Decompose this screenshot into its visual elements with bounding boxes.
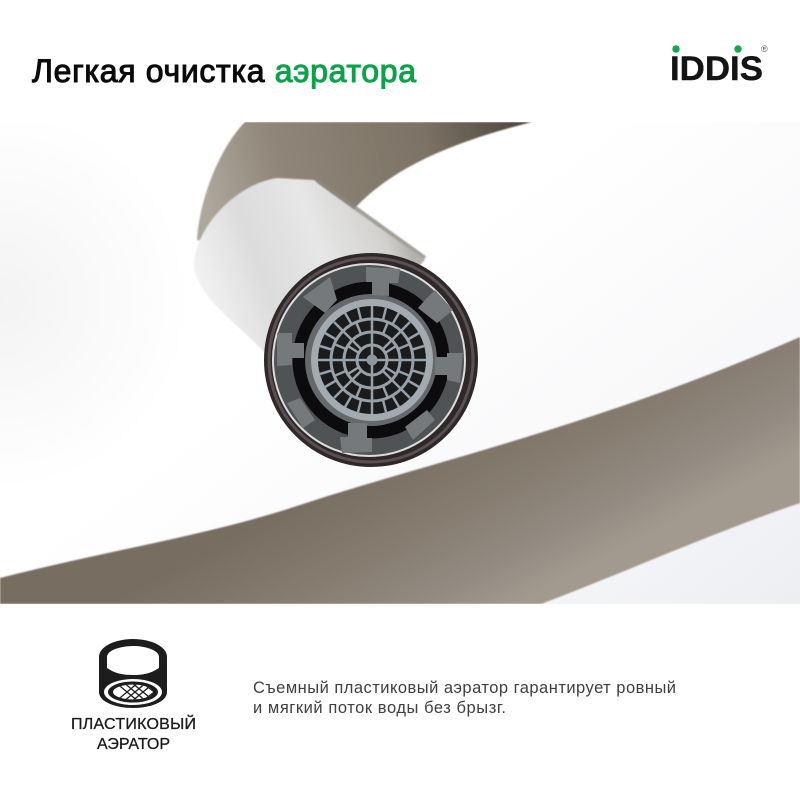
photo: faucet aerator close-up: [0, 122, 800, 604]
logo: IDDIS: ®: [761, 44, 768, 54]
spout dark edge: [318, 181, 425, 258]
T-shaped and block tabs: [277, 267, 463, 453]
black gap ring: [300, 289, 442, 431]
description text: [253, 679, 676, 717]
faucet arc tube: [196, 122, 532, 241]
icon caption: АЭРАТОР: [97, 736, 170, 753]
icon: plastic aerator: [99, 639, 167, 708]
description text: и мягкий поток воды без брызг.: [253, 699, 506, 717]
aerator assembly: [264, 253, 478, 467]
faucet lower tube band: [0, 337, 800, 604]
icon caption: [71, 714, 196, 753]
title: Легкая очистка аэратора: [32, 53, 416, 89]
brushed steel spout: [194, 177, 426, 352]
metal bezel: [264, 253, 478, 467]
outer spokes: [318, 306, 426, 414]
logo: IDDIS: IDDIS: [670, 50, 763, 88]
middle spokes: [331, 319, 413, 401]
inner spokes: [346, 334, 398, 386]
description text: Съемный пластиковый аэратор гарантирует ровный: [253, 679, 676, 697]
inner grey collar: [305, 294, 437, 426]
icon caption: ПЛАСТИКОВЫЙ: [71, 714, 196, 733]
aerator mesh disk: [311, 299, 433, 421]
